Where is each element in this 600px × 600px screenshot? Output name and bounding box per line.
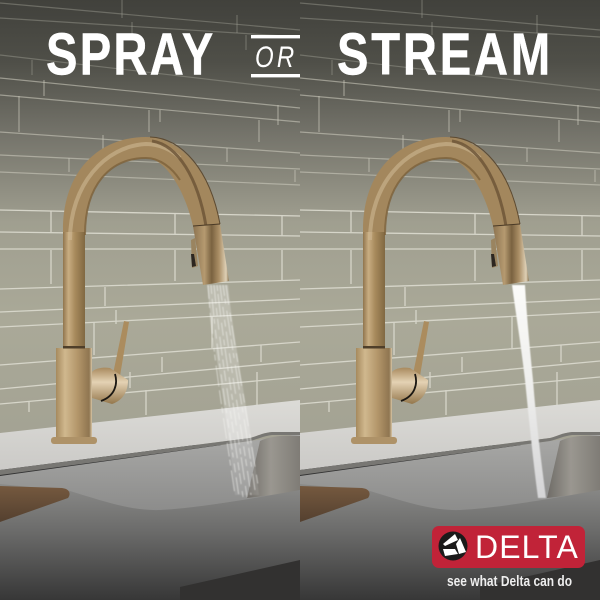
logo: delta — [432, 526, 585, 568]
logo: delta: DELTA — [475, 529, 579, 565]
left panel: spray faucet scene — [0, 0, 300, 600]
or divider — [251, 35, 300, 77]
title: stream: STREAM — [337, 23, 553, 88]
water spray — [207, 285, 259, 497]
right panel: stream faucet scene — [300, 0, 600, 600]
tagline: see what Delta can do — [447, 573, 572, 590]
water stream — [512, 285, 546, 498]
title: spray: SPRAY — [46, 23, 215, 88]
or divider: OR — [255, 39, 297, 74]
icon: delta emblem — [438, 532, 468, 560]
